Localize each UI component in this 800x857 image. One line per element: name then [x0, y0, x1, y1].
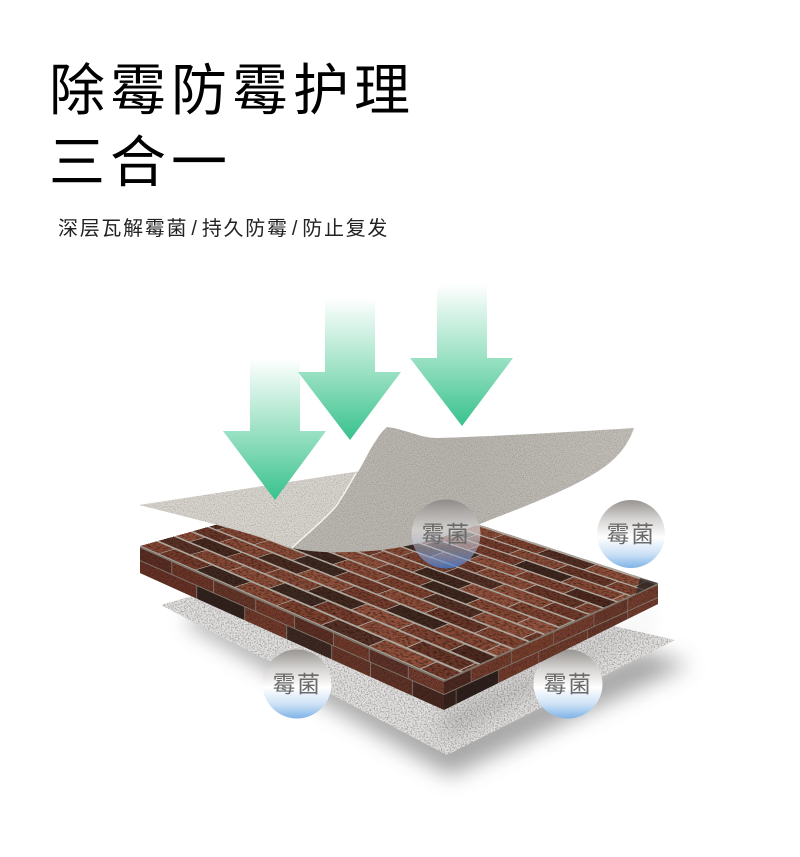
fold highlight [292, 473, 356, 548]
heading: title [49, 59, 415, 194]
heading: title: 三合一 [49, 131, 232, 194]
mould circle: lower left: 霉菌 [272, 671, 322, 697]
arrow: middle [298, 298, 401, 440]
panel: brick wall top face [140, 524, 658, 680]
subtitle text: 深层瓦解霉菌/持久防霉/防止复发 [58, 218, 389, 240]
mould circle: lower left [262, 650, 332, 718]
arrow: left [223, 358, 326, 500]
mortar background [140, 485, 658, 680]
mould circle: upper right [597, 500, 665, 568]
heading: title: 除霉防霉护理 [49, 59, 415, 122]
shadow cast by the wall on the sheet [444, 612, 660, 735]
panel: brick wall sides [140, 546, 658, 710]
brick courses [114, 477, 766, 731]
peeled part of coating sheet [292, 427, 634, 552]
arrow: right [410, 284, 513, 426]
base sheet [161, 596, 675, 755]
flat part of coating sheet [139, 470, 372, 548]
mould circle: lower right: 霉菌 [544, 671, 592, 697]
mould circle: upper right: 霉菌 [606, 521, 656, 547]
mould circle: centre over wall: 霉菌 [422, 521, 470, 547]
left side face [140, 546, 444, 710]
mould circle: lower right [534, 650, 602, 718]
shadow under base sheet [185, 610, 690, 776]
dark corner edge of the wall [636, 578, 658, 594]
mould circle: centre over wall [412, 500, 480, 568]
right side face [444, 583, 658, 710]
